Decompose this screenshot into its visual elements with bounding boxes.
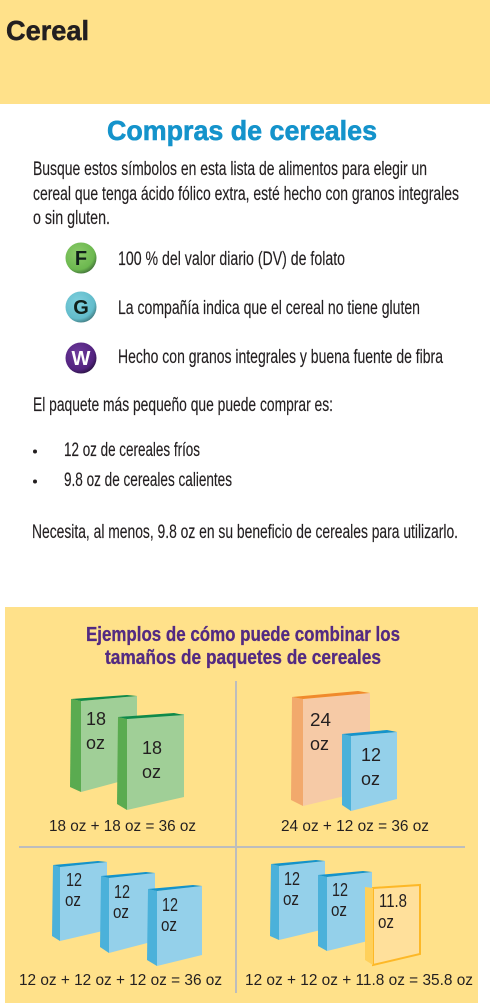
- box: 12 oz second: 12: [332, 880, 348, 900]
- box: 12 oz: oz: [361, 769, 380, 789]
- header band: [0, 0, 490, 104]
- box: 12 oz second: oz: [331, 900, 347, 920]
- panel: package combinations: [5, 607, 478, 1003]
- box: 12 oz second: 12: [114, 882, 130, 902]
- equation: 12 oz + 12 oz + 12 oz = 36 oz: [19, 972, 222, 989]
- box: 24 oz: [291, 691, 370, 806]
- box: 12 oz first: [270, 860, 325, 940]
- bullet list: [33, 440, 232, 491]
- panel heading: tamaños de paquetes de cereales: [105, 647, 381, 669]
- box: 12 oz first: 12: [66, 870, 82, 890]
- box: 12 oz third: oz: [161, 915, 177, 935]
- example: two 12 oz boxes and one 11.8 oz box: [245, 860, 473, 989]
- panel heading: Ejemplos de cómo puede combinar los: [86, 624, 400, 646]
- icon: F badge: [66, 242, 96, 274]
- symbol row: folate: 100 % del valor diario (DV) de folato: [118, 249, 345, 270]
- icon: G badge: [66, 292, 96, 322]
- box: 12 oz first: oz: [283, 889, 299, 909]
- box: 18 oz: 18: [86, 709, 106, 729]
- box: 12 oz second: oz: [113, 902, 129, 922]
- box: 12 oz first: oz: [65, 890, 81, 910]
- box: 18 oz front: [117, 713, 184, 810]
- header title: Cereal: [6, 15, 89, 46]
- bullet list: 12 oz de cereales fríos: [64, 440, 200, 461]
- box: 11.8 oz: [365, 885, 420, 965]
- box: 12 oz second: [100, 872, 155, 953]
- box: 18 oz front: 18: [142, 738, 162, 758]
- box: 12 oz: [342, 730, 397, 811]
- icon: W badge: W: [72, 348, 91, 370]
- box: 11.8 oz: 11.8: [379, 891, 407, 911]
- box: 11.8 oz: oz: [378, 912, 394, 932]
- icon: G badge: G: [73, 297, 89, 319]
- intro text: o sin gluten.: [33, 208, 110, 229]
- box: 12 oz third: 12: [162, 895, 178, 915]
- icon: F badge: F: [75, 248, 87, 270]
- box: 18 oz front: oz: [142, 762, 161, 782]
- equation: 24 oz + 12 oz = 36 oz: [281, 818, 429, 835]
- example: two 18 oz boxes: [49, 695, 196, 835]
- box: 12 oz second: [318, 871, 372, 951]
- equation: 12 oz + 12 oz + 11.8 oz = 35.8 oz: [245, 972, 473, 989]
- equation: 18 oz + 18 oz = 36 oz: [49, 818, 196, 835]
- box: 24 oz: 24: [310, 710, 331, 730]
- box: 18 oz: [70, 695, 137, 792]
- symbol row: whole grain: [66, 342, 443, 374]
- box: 12 oz first: [52, 861, 107, 941]
- bullet list: 9.8 oz de cereales calientes: [64, 470, 232, 491]
- example: 24 oz and 12 oz boxes: [281, 691, 429, 835]
- symbol row: gluten free: [66, 292, 420, 322]
- box: 12 oz: 12: [361, 745, 381, 765]
- box: 12 oz first: 12: [284, 869, 300, 889]
- box: 12 oz third: [147, 885, 202, 966]
- section heading: Compras de cereales: [107, 115, 377, 146]
- box: 18 oz: oz: [86, 733, 105, 753]
- smallest package text: El paquete más pequeño que puede comprar es:: [33, 395, 333, 416]
- intro text: [33, 159, 459, 229]
- example: three 12 oz boxes: [19, 861, 222, 989]
- box: 24 oz: oz: [310, 734, 329, 754]
- icon: W badge: [66, 342, 96, 374]
- symbol row: folate: [66, 242, 345, 274]
- panel heading: [86, 624, 400, 669]
